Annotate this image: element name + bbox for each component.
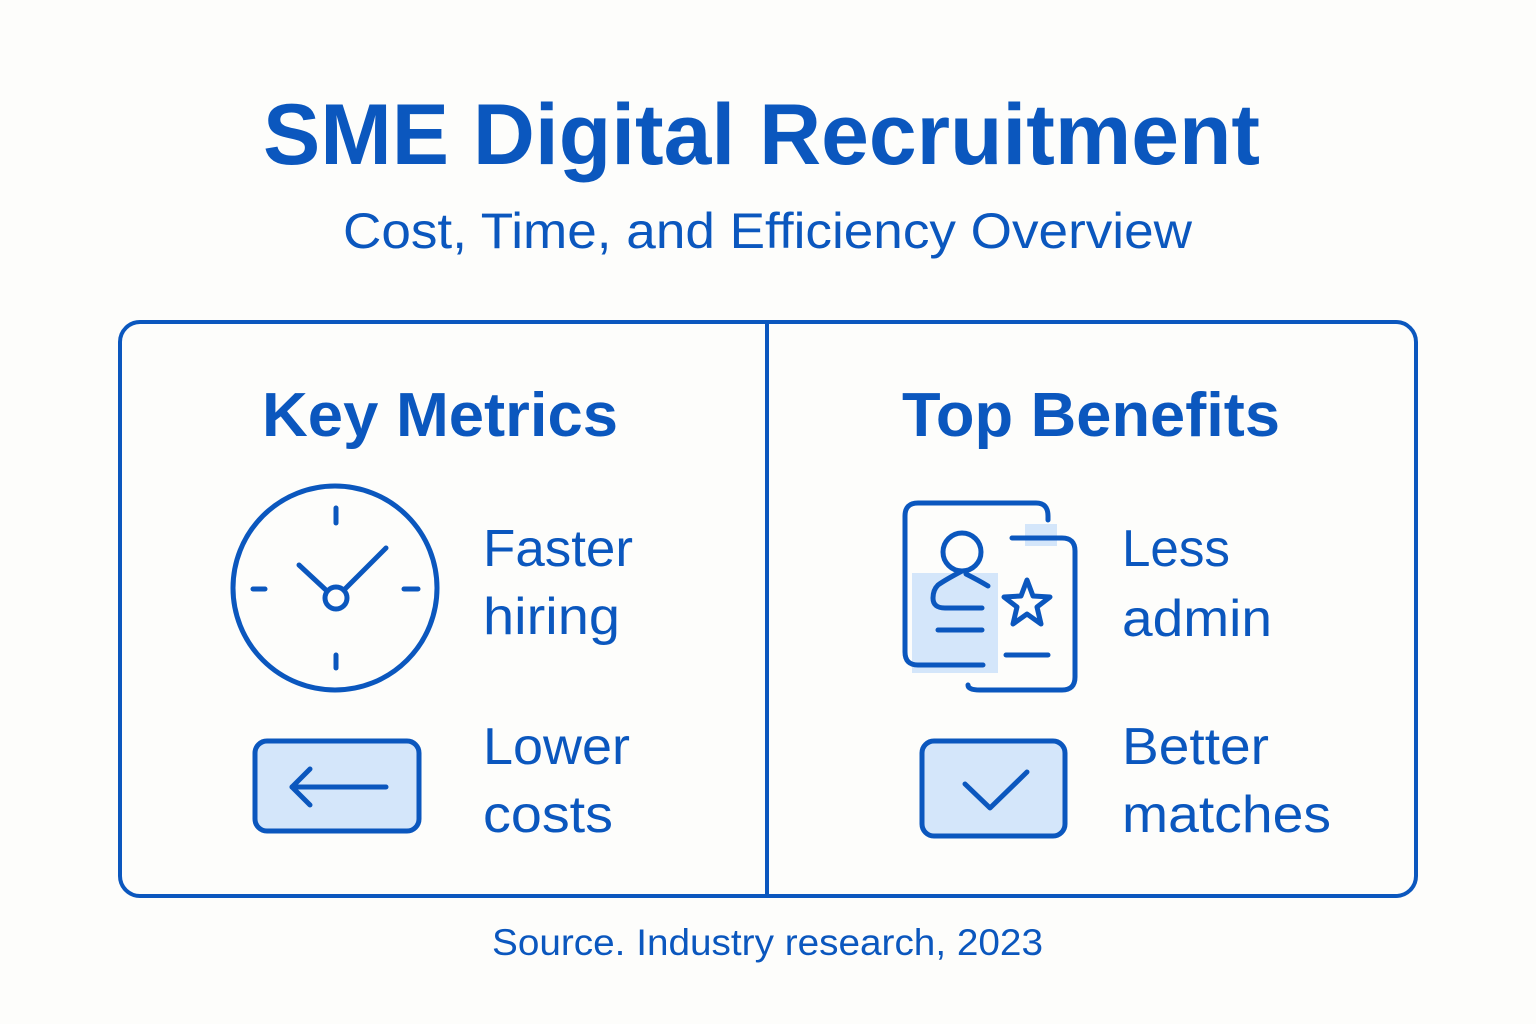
panel: key metrics: hiring — [483, 588, 620, 646]
text: faster hiring: Faster — [483, 520, 633, 578]
panel: top benefits: admin — [1122, 590, 1272, 648]
text: better matches: Better — [1122, 718, 1269, 776]
heading: top benefits: Top Benefits — [902, 381, 1280, 450]
source note: Source. Industry research, 2023 — [492, 922, 1043, 963]
panel: key metrics: costs — [483, 786, 613, 844]
subtitle: Cost, Time, and Efficiency Overview — [343, 203, 1193, 259]
panel: top benefits: matches — [1122, 786, 1331, 844]
icon: clock — [233, 486, 437, 690]
icon: documents — [905, 503, 1075, 690]
panel: top benefits — [902, 381, 1331, 844]
text: lower costs: Lower — [483, 718, 630, 776]
text: less admin: Less — [1122, 520, 1230, 578]
panel: key metrics — [233, 381, 633, 844]
title: SME Digital Recruitment — [263, 87, 1260, 183]
panel frame — [120, 322, 1416, 896]
icon: checkbox — [922, 741, 1065, 836]
heading: key metrics: Key Metrics — [262, 381, 618, 450]
icon: arrow box — [255, 741, 419, 831]
